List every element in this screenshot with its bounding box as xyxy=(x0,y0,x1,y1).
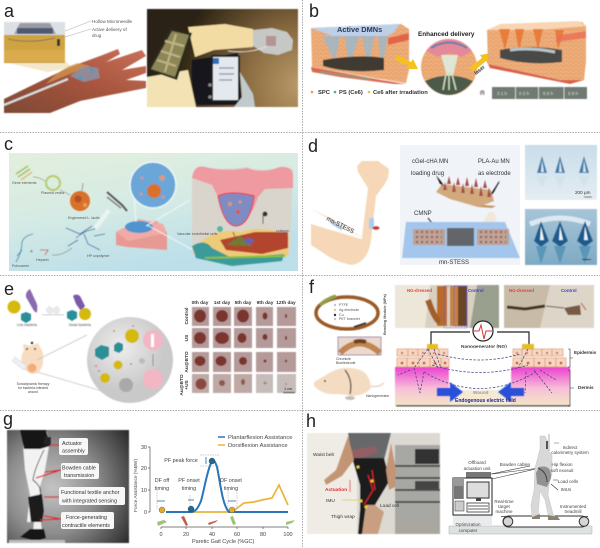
panel h: hip exosuit on treadmill xyxy=(306,411,592,534)
schematic labels xyxy=(455,445,589,533)
photo captions xyxy=(407,288,577,293)
chart annotations: timing xyxy=(155,486,169,492)
schematic labels: Instrumented xyxy=(560,504,587,509)
treadmill schematic xyxy=(449,515,592,534)
peak force annotation xyxy=(157,455,237,510)
panel c labels: Poloxamer xyxy=(12,264,30,268)
label b: b xyxy=(309,1,319,21)
panel c labels xyxy=(12,181,289,268)
arrow to magnified view xyxy=(395,55,418,69)
rat labels: Nanogenerator xyxy=(366,394,390,398)
skin and wound cross-section xyxy=(395,344,570,406)
cross-section text: Wound xyxy=(473,390,489,395)
schematic labels: treadmill xyxy=(564,509,582,514)
photo: forearm with smartphone xyxy=(147,9,298,107)
engineered cell flow diagram: + xyxy=(30,249,33,255)
scale label: 1 cm xyxy=(284,387,292,391)
photo labels: Waist belt xyxy=(313,452,335,458)
ultrasound therapy caption xyxy=(17,382,50,394)
ring legend xyxy=(334,303,360,321)
label g: g xyxy=(3,409,13,429)
schematic labels: as electrode xyxy=(478,171,511,177)
mouse with wound xyxy=(12,335,102,391)
legend xyxy=(311,90,428,96)
SEM image top xyxy=(525,145,597,200)
panel a: microneedle wristband xyxy=(4,1,298,113)
callout labels: transmission xyxy=(64,473,94,479)
fluorescence image strip: 0 2 h xyxy=(519,91,530,96)
fluorescence image strip: 3 1 h xyxy=(497,91,508,96)
schematic labels: machine xyxy=(495,509,513,514)
SEM scale label: 200 μm xyxy=(575,190,591,195)
row labels: Au@BTO xyxy=(184,351,190,373)
label c: c xyxy=(4,134,13,154)
y tick labels: 30 xyxy=(141,445,147,451)
x tick labels: 20 xyxy=(183,532,189,538)
chart annotations: DF onset xyxy=(220,478,242,484)
chart annotations: timing xyxy=(182,486,196,492)
live bacteria xyxy=(8,289,37,327)
photo captions: NG-dressed xyxy=(509,288,534,293)
photo: leg with exosuit xyxy=(7,430,129,543)
schematic labels: Indirect xyxy=(563,445,578,450)
panel c labels: Heparin xyxy=(36,258,49,262)
schematic labels: Hip flexion xyxy=(551,462,573,467)
x tick labels: 60 xyxy=(234,532,240,538)
inset labels xyxy=(65,19,133,38)
panel c labels: collagen xyxy=(276,229,289,233)
ring legend: PET bracelet xyxy=(339,317,360,321)
fluorescence image strip: (f) xyxy=(480,90,485,95)
panel e: piezocatalytic antibacterial therapy xyxy=(4,279,296,403)
wound and skin layers model xyxy=(147,166,293,266)
label h: h xyxy=(306,411,316,431)
schematic labels: Bowden cables xyxy=(500,462,531,467)
day labels: 5th day xyxy=(235,300,252,306)
ultrasound therapy caption: Sonodynamic therapy xyxy=(17,382,50,386)
plantarflexion curve xyxy=(166,461,288,512)
row labels: US xyxy=(184,334,190,341)
inset labels: Hollow Microneedle xyxy=(92,19,133,24)
chart annotations: PF onset xyxy=(178,478,200,484)
arm patch label: mn-STESS xyxy=(325,216,355,235)
fluorescence image strip xyxy=(480,87,587,99)
schematic labels: Optimization xyxy=(455,522,481,527)
label e: e xyxy=(4,279,14,299)
electric field lines xyxy=(398,349,556,393)
label d: d xyxy=(308,136,318,156)
microneedle array xyxy=(428,175,500,226)
day labels xyxy=(192,300,296,306)
ring device xyxy=(316,296,378,329)
photo labels xyxy=(313,452,399,520)
mn-STESS schematic panel xyxy=(400,145,520,265)
cross-section text: Endogenous electric field xyxy=(455,398,516,404)
x tick labels: 40 xyxy=(209,532,215,538)
ring legend: Ag electrode xyxy=(339,308,359,312)
force assistance chart xyxy=(133,435,295,545)
walking figure xyxy=(531,434,560,520)
photo captions: Control xyxy=(561,288,577,293)
callout labels: Bowden cable xyxy=(62,466,96,472)
photo labels: Thigh wrap xyxy=(331,514,355,520)
row labels: Control xyxy=(184,307,190,325)
heading: Active DMNs: Active DMNs xyxy=(337,25,382,34)
x tick labels: 80 xyxy=(260,532,266,538)
photo labels: Actuation xyxy=(325,487,347,493)
arrow to treated skin xyxy=(469,53,491,71)
rat labels: Bioelectrode xyxy=(336,361,356,365)
fluorescence image strip: 6 6 h xyxy=(543,91,554,96)
magnified hydrogel circle xyxy=(130,162,190,226)
legend: SPC xyxy=(318,90,331,96)
schematic labels: mn-STESS xyxy=(439,260,469,266)
schematic labels xyxy=(410,159,511,266)
cross-section text xyxy=(455,350,597,404)
day labels: 12th day xyxy=(276,300,296,306)
laser label: laser xyxy=(474,65,486,77)
rat xyxy=(314,368,384,400)
chart annotations: PF peak force xyxy=(164,458,198,464)
fluorescence image strip: 5 8 h xyxy=(568,91,579,96)
conversion arrow xyxy=(42,306,64,315)
panel g: soft exosuit assistance xyxy=(3,409,295,545)
legend: PS (Ce6) xyxy=(339,90,363,96)
inset: hollow microneedle cross-section xyxy=(4,22,72,72)
ring close-up inset xyxy=(338,337,381,355)
schematic labels: Load cells xyxy=(558,479,579,484)
SEM image bottom xyxy=(525,209,597,265)
bending axis label: Bending Module (MPa) xyxy=(383,293,387,335)
inset labels: Active delivery of xyxy=(92,27,127,32)
photo: NG-dressed vs control day 0 xyxy=(395,285,499,328)
x axis title: Paretic Gait Cycle (%GC) xyxy=(192,539,255,545)
row labels xyxy=(179,307,190,396)
photo: walking person with exosuit xyxy=(307,433,440,534)
panel c labels: HP copolymer xyxy=(87,254,110,258)
left skin block with active DMNs xyxy=(311,24,409,84)
live bacteria: Live bacteria xyxy=(17,323,37,327)
y tick labels xyxy=(141,445,147,516)
panel b: active dissolving microneedles xyxy=(309,1,587,99)
label f: f xyxy=(309,277,315,297)
x tick labels: 100 xyxy=(283,532,293,538)
panel d: self-powered microneedle system xyxy=(308,136,597,266)
endogenous field arrows xyxy=(437,382,524,402)
callout labels: Actuator xyxy=(62,441,82,447)
y tick labels: 0 xyxy=(144,510,147,516)
callout labels xyxy=(59,438,125,529)
schematic labels: PLA-Au MN xyxy=(478,159,510,165)
panel c labels: Engineered L. lactis xyxy=(68,216,100,220)
dead bacteria: Dead bacteria xyxy=(69,323,91,327)
chart annotations: timing xyxy=(224,486,238,492)
callout labels: contractile elements xyxy=(62,523,110,529)
ring legend: PTFE xyxy=(339,303,349,307)
magnified wound circle xyxy=(87,317,173,403)
schematic labels: Offboard xyxy=(468,460,486,465)
panel f: nanogenerator wound healing xyxy=(309,277,597,406)
schematic labels: target xyxy=(498,504,510,509)
engineered cell flow diagram xyxy=(16,166,127,262)
chart legend: Dorsiflexion Assistance xyxy=(228,443,288,449)
rat labels xyxy=(336,357,390,398)
x tick labels xyxy=(159,532,293,538)
annotation arrows xyxy=(157,457,236,501)
hand with patch xyxy=(4,49,146,113)
schematic labels: CMNP xyxy=(414,211,432,217)
schematic labels: Real-time xyxy=(494,499,514,504)
label a: a xyxy=(4,1,15,21)
photo captions: NG-dressed xyxy=(407,288,432,293)
right skin block after irradiation xyxy=(487,21,586,84)
schematic labels: loading drug xyxy=(411,171,444,177)
sf-TENG device xyxy=(402,212,520,258)
heading: Enhanced delivery: Enhanced delivery xyxy=(418,31,475,38)
ring legend: Cu xyxy=(339,313,344,317)
day labels: 1st day xyxy=(214,300,231,306)
callout labels: assembly xyxy=(62,448,85,454)
callout labels: Functional textile anchor xyxy=(61,490,120,496)
callout labels: Force-generating xyxy=(66,515,107,521)
cross-section text: Dermis xyxy=(578,385,594,390)
day labels: 0th day xyxy=(192,300,209,306)
rat labels: Chronicle xyxy=(336,357,351,361)
schematic labels: soft exosuit xyxy=(551,468,574,473)
foot icons xyxy=(157,516,295,526)
chart annotations: DF off xyxy=(155,478,170,484)
schematic labels: computer xyxy=(459,528,478,533)
y tick labels: 10 xyxy=(141,488,147,494)
dead bacteria xyxy=(67,294,91,327)
schematic labels: cGel-cHA MN xyxy=(412,159,448,165)
row labels: +US xyxy=(184,379,190,390)
x tick labels: 0 xyxy=(159,532,163,538)
inset labels: drug xyxy=(92,33,102,38)
panel c labels: Vascular endothelial cells xyxy=(177,232,217,236)
chart axes xyxy=(148,447,288,529)
chart annotations xyxy=(155,458,242,492)
ultrasound therapy caption: for bacteria-infected xyxy=(18,386,48,390)
schematic labels: sf-TENG xyxy=(410,248,434,254)
chart legend xyxy=(218,435,292,449)
callout labels: with integrated sensing xyxy=(61,498,117,504)
magnified circle xyxy=(421,39,477,95)
legend: Ce6 after irradiation xyxy=(373,90,428,96)
nanogenerator label: Nanogenerator (NG) xyxy=(461,344,507,350)
hydrogel skin block xyxy=(116,219,167,250)
offboard computer cart xyxy=(453,466,540,515)
dorsiflexion curve xyxy=(166,485,288,512)
chart legend: Plantarflexion Assistance xyxy=(228,435,292,441)
nanogenerator wiring and symbol xyxy=(431,321,529,345)
day labels: 9th day xyxy=(257,300,274,306)
schematic labels: calorimetry system xyxy=(551,450,589,455)
photo captions: Control xyxy=(468,288,484,293)
background panel xyxy=(9,153,298,271)
photo: NG-dressed vs control healed xyxy=(504,285,594,328)
panel c labels: Plasmid vector xyxy=(41,191,65,195)
layer brackets xyxy=(568,349,574,406)
y axis title: Force Assistance (%BW) xyxy=(133,459,139,512)
timing markers xyxy=(159,458,235,513)
arm with patch xyxy=(311,161,389,265)
wound photo grid xyxy=(192,307,296,393)
panel c labels: Gene elements xyxy=(12,181,37,185)
panel c: engineered hydrogel for wound healing xyxy=(4,134,298,271)
y tick labels: 20 xyxy=(141,466,147,472)
schematic labels: actuation unit xyxy=(464,466,491,471)
photo labels: Load cell xyxy=(380,503,399,509)
cross-section text: Epidermis xyxy=(574,350,597,355)
ultrasound therapy caption: wound xyxy=(28,390,38,394)
schematic labels: IMUs xyxy=(561,487,572,492)
photo labels: IMU xyxy=(326,498,335,504)
row labels: Au@BTO xyxy=(179,374,185,396)
